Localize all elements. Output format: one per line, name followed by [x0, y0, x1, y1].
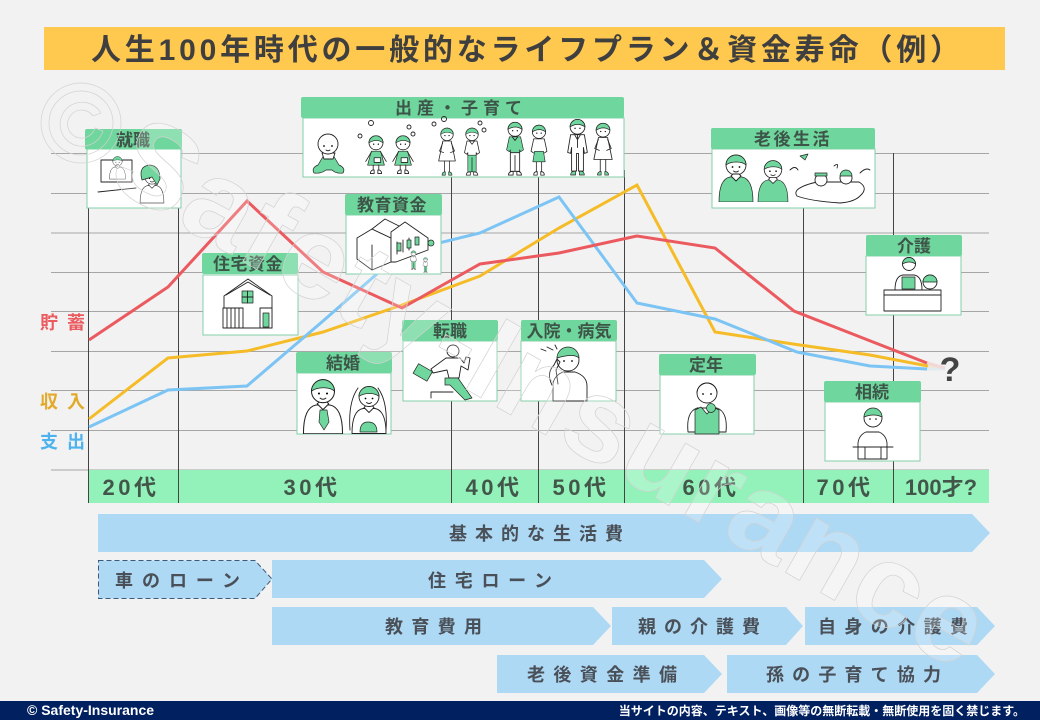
card: housing funds: 住宅資金	[213, 254, 283, 274]
watermark: Safety-Insurance	[91, 90, 1011, 694]
expenses line	[89, 197, 927, 427]
card: education funds: 教育資金	[357, 195, 427, 215]
age band: 30代	[284, 475, 340, 500]
arrow: education costs: 教育費用	[385, 617, 482, 637]
card: nursing care: 介護	[897, 237, 931, 256]
icon: baby	[313, 134, 344, 173]
icon: school building	[357, 219, 434, 273]
age band: 100才?	[905, 475, 977, 500]
card: retirement: 定年	[689, 355, 723, 375]
icon: retiree holding flowers	[688, 383, 726, 434]
arrow: parents' nursing costs: 親の介護費	[638, 617, 760, 637]
arrow: car loan	[98, 560, 272, 598]
card: childbirth and child-rearing	[301, 97, 624, 177]
age band	[88, 470, 989, 503]
icon: bath care	[884, 258, 941, 311]
icon: teenagers	[507, 122, 547, 175]
arrow: education costs	[272, 607, 611, 645]
age band: 20代	[103, 475, 159, 500]
age band: 50代	[553, 475, 609, 500]
arrow: own nursing costs: 自身の介護費	[818, 617, 968, 637]
arrow: basic living costs: 基本的な生活費	[449, 524, 623, 544]
card: life after retirement: 老後生活	[754, 129, 832, 149]
icon: preschool children	[358, 120, 415, 174]
icon: young adults	[568, 119, 612, 175]
age dividers	[88, 153, 894, 503]
arrow: housing loan: 住宅ローン	[428, 571, 552, 591]
card: retirement	[659, 354, 756, 434]
savings line	[89, 201, 927, 363]
card: nursing care	[866, 235, 962, 315]
question mark: ?	[940, 351, 960, 389]
arrow: basic living costs	[98, 514, 990, 552]
income line	[89, 185, 928, 419]
arrow: retirement fund preparation: 老後資金準備	[527, 664, 677, 685]
arrow: housing loan	[272, 560, 722, 598]
age band: 60代	[683, 475, 739, 500]
age band: 40代	[466, 475, 522, 500]
card: childbirth and child-rearing: 出産・子育て	[395, 99, 527, 118]
card: job hunting	[85, 129, 182, 208]
icon: school children	[432, 116, 486, 175]
title banner	[44, 27, 1005, 70]
arrow: own nursing costs	[805, 607, 995, 645]
card: marriage: 結婚	[326, 354, 360, 373]
icon: senior couple	[719, 155, 788, 202]
card: education funds	[345, 194, 442, 274]
chart grid	[51, 154, 989, 470]
icon: hot spring bath	[790, 154, 870, 203]
card: hospitalisation and illness: 入院・病気	[526, 322, 612, 341]
card: hospitalisation and illness	[521, 320, 617, 401]
icon: person with headache	[541, 345, 587, 401]
card: job change	[402, 320, 498, 401]
card: job hunting: 就職	[116, 131, 150, 150]
legend: expenses: 支出	[40, 432, 85, 452]
icon: running worker with briefcase	[413, 345, 472, 400]
footer: © Safety-Insurance	[27, 702, 154, 718]
arrow: helping raise grandchildren	[727, 655, 995, 693]
card: inheritance: 相続	[855, 383, 889, 402]
arrow: parents' nursing costs	[612, 607, 803, 645]
icon: person signing document	[853, 408, 893, 459]
title banner: 人生100年時代の一般的なライフプラン＆資金寿命（例）	[91, 34, 960, 67]
card: inheritance	[824, 381, 921, 461]
arrow: car loan: 車のローン	[115, 571, 240, 591]
card: marriage	[296, 352, 392, 434]
card: housing funds	[202, 253, 298, 335]
arrow: retirement fund preparation	[497, 655, 722, 693]
line chart: savings, income, expenses	[89, 185, 928, 427]
footer: 当サイトの内容、テキスト、画像等の無断転載・無断使用を固く禁じます。	[619, 703, 1025, 718]
legend: income: 収入	[40, 392, 85, 412]
arrow: helping raise grandchildren: 孫の子育て協力	[766, 665, 941, 685]
age band: 70代	[817, 475, 873, 500]
footer	[0, 701, 1040, 720]
fading end of lines	[927, 363, 945, 369]
icon: house	[223, 279, 272, 328]
card: life after retirement	[711, 128, 875, 208]
legend: savings: 貯蓄	[40, 313, 85, 333]
card: job change: 転職	[433, 322, 467, 341]
icon: bride and groom	[303, 380, 386, 434]
icon: online interview	[98, 157, 164, 203]
